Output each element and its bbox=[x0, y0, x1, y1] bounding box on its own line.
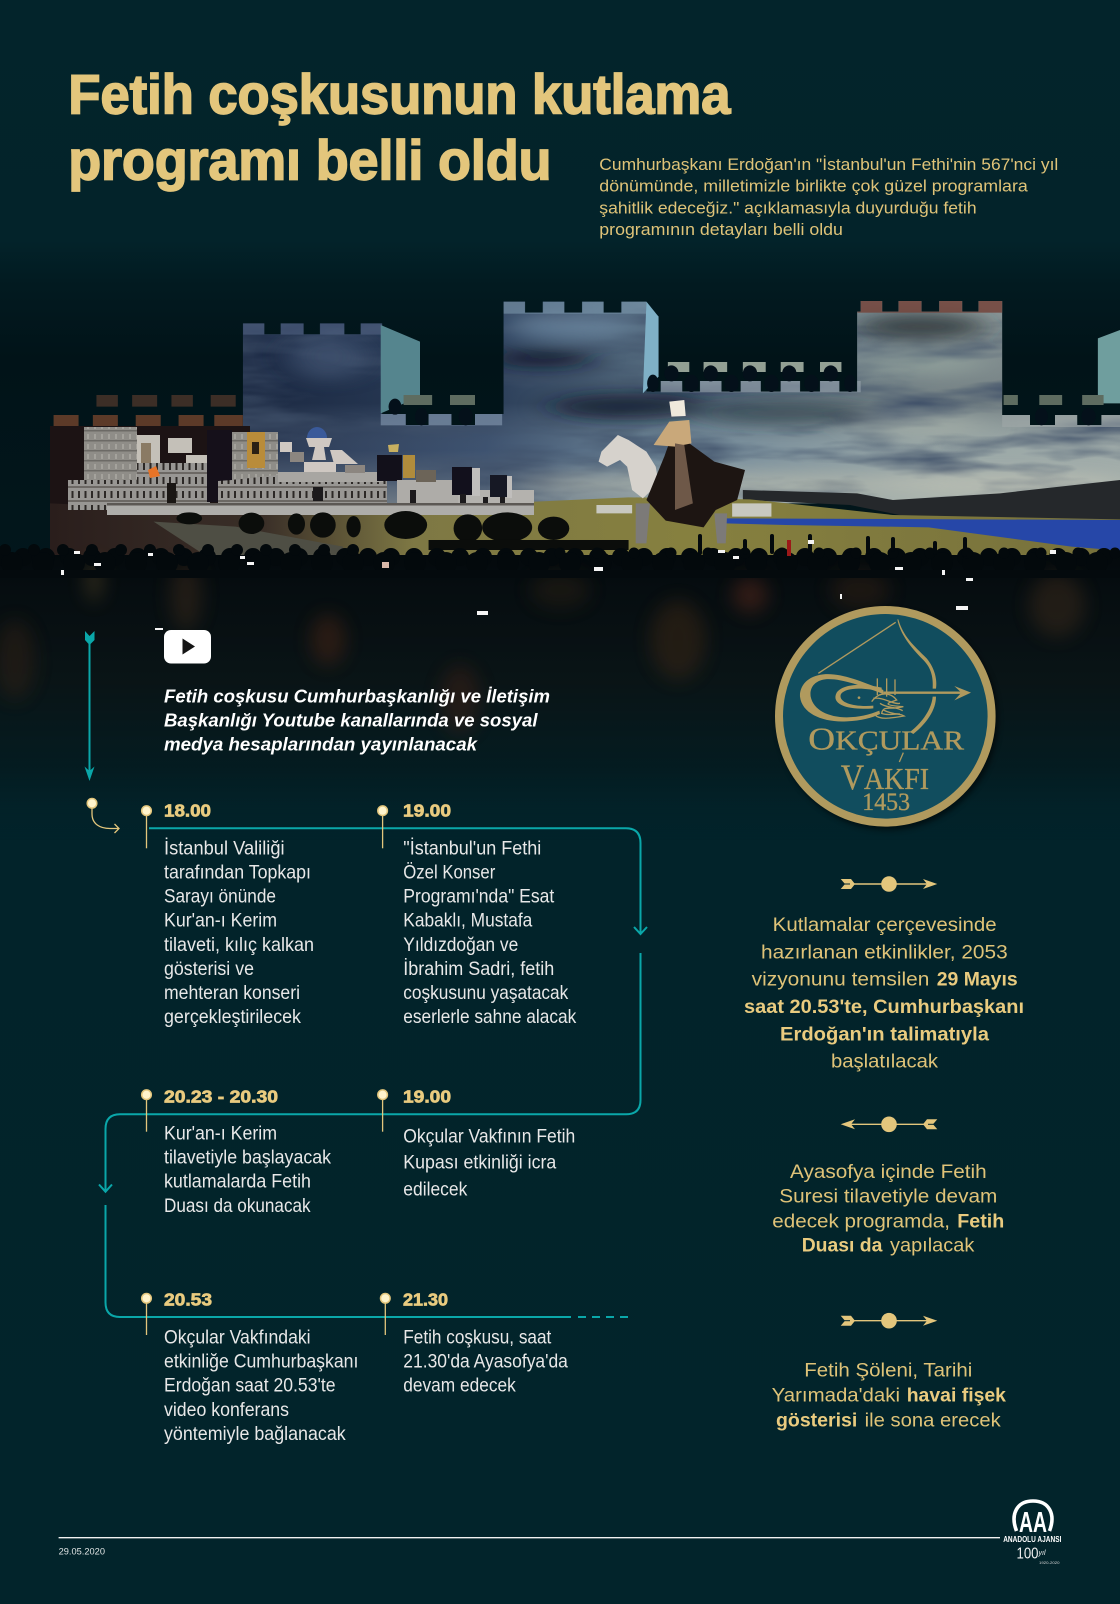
event 18.00: gösterisi ve bbox=[164, 958, 254, 980]
event 19.00 concert: Kabaklı, Mustafa bbox=[403, 910, 532, 932]
youtube broadcast note: Başkanlığı Youtube kanallarında ve sosyal bbox=[164, 710, 538, 731]
footer rule and date: 29.05.2020 bbox=[59, 1546, 105, 1557]
event 21.30 bbox=[380, 1290, 568, 1397]
event 18.00: Sarayı önünde bbox=[164, 886, 276, 908]
text: Hagia Sophia programme: Fetih bbox=[957, 1210, 1004, 1232]
event 20.23 - 20.30: 20.23 - 20.30 bbox=[164, 1086, 278, 1106]
youtube broadcast note bbox=[164, 686, 550, 755]
icon: youtube play button bbox=[164, 630, 211, 664]
text: fireworks show: Fetih Şöleni, Tarihi bbox=[804, 1360, 972, 1382]
brown lit shoulders in the crowd bbox=[0, 558, 1085, 735]
event 19.00 concert: Özel Konser bbox=[403, 861, 496, 883]
event 19.00 cup: Kupası etkinliği icra bbox=[403, 1152, 556, 1174]
intro text block: programının detayları belli oldu bbox=[599, 221, 843, 239]
event 18.00: mehteran konseri bbox=[164, 982, 300, 1004]
event 18.00: gerçekleştirilecek bbox=[164, 1006, 301, 1028]
mountains bbox=[743, 480, 1120, 519]
arrow: teal vertical arrow bbox=[84, 631, 94, 781]
logo: Anadolu Ajansı bbox=[1003, 1501, 1061, 1565]
event 18.00 bbox=[142, 801, 314, 1028]
event 21.30: devam edecek bbox=[403, 1375, 516, 1397]
text: celebrations start: saat 20.53'te, Cumhurbaşkanı bbox=[744, 996, 1024, 1018]
text: fireworks show: Yarımada'daki bbox=[772, 1385, 900, 1407]
intro text block bbox=[599, 155, 1058, 239]
photo: castle walls projection show with crowd bbox=[0, 297, 1120, 840]
event 20.23 - 20.30: Duası da okunacak bbox=[164, 1195, 311, 1217]
event 18.00: İstanbul Valiliği bbox=[164, 836, 285, 859]
dim crowd below the projection bbox=[0, 555, 1120, 840]
text: Hagia Sophia programme: Suresi tilavetiyle devam bbox=[779, 1186, 997, 1208]
event 18.00: 18.00 bbox=[164, 801, 211, 821]
event 19.00 concert: İbrahim Sadri, fetih bbox=[403, 957, 554, 980]
icon: bow and arrow with tughra bbox=[800, 619, 971, 762]
text: Hagia Sophia programme: edecek programda, bbox=[772, 1210, 950, 1232]
event 20.53: yöntemiyle bağlanacak bbox=[164, 1423, 346, 1445]
event 19.00 cup: Okçular Vakfının Fetih bbox=[403, 1125, 575, 1147]
arrow: teal timeline path bbox=[99, 828, 647, 1317]
intro text block: şahitlik edeceğiz." açıklamasıyla duyurduğu fetih bbox=[599, 199, 977, 217]
event 19.00 concert: Programı'nda" Esat bbox=[403, 886, 555, 908]
intro text block: dönümünde, milletimizle birlikte çok güzel programlara bbox=[599, 178, 1029, 196]
logo: Anadolu Ajansı: yıl bbox=[1038, 1550, 1046, 1557]
youtube broadcast note: medya hesaplarından yayınlanacak bbox=[164, 734, 479, 755]
event 20.23 - 20.30 bbox=[142, 1086, 331, 1217]
title bbox=[68, 62, 731, 191]
logo: Anadolu Ajansı: ANADOLU AJANSI bbox=[1003, 1534, 1061, 1544]
text: fireworks show: gösterisi bbox=[776, 1410, 857, 1432]
event 19.00 concert: Yıldızdoğan ve bbox=[403, 934, 518, 956]
text: celebrations start: 29 Mayıs bbox=[937, 969, 1018, 991]
text: Hagia Sophia programme: Ayasofya içinde Fetih bbox=[790, 1161, 987, 1183]
logo: Okçular Vakfı badge: OKÇULAR bbox=[808, 720, 964, 756]
event 20.53: Okçular Vakfındaki bbox=[164, 1326, 311, 1348]
logo: Anadolu Ajansı: 1920-2020 bbox=[1039, 1561, 1060, 1565]
river bbox=[725, 518, 1120, 551]
event 19.00 cup: 19.00 bbox=[403, 1086, 451, 1106]
event 20.53: etkinliğe Cumhurbaşkanı bbox=[164, 1351, 358, 1373]
arrow: gold start curve bbox=[87, 798, 119, 833]
event 19.00 concert: eserlerle sahne alacak bbox=[403, 1006, 577, 1028]
field bbox=[50, 497, 1120, 557]
text: celebrations start: hazırlanan etkinlikler, 2053 bbox=[761, 941, 1008, 963]
event 18.00: Kur'an-ı Kerim bbox=[164, 910, 277, 932]
event 20.53 bbox=[142, 1290, 358, 1445]
intro text block: Cumhurbaşkanı Erdoğan'ın "İstanbul'un Fethi'nin 567'nci yıl bbox=[599, 155, 1058, 174]
logo: Anadolu Ajansı: AA bbox=[1019, 1507, 1047, 1539]
event 21.30: 21.30 bbox=[403, 1290, 448, 1310]
icon: arrow divider 3 bbox=[841, 1313, 937, 1328]
text: fireworks show: ile sona erecek bbox=[865, 1410, 1001, 1432]
event 21.30: Fetih coşkusu, saat bbox=[403, 1326, 552, 1348]
text: Hagia Sophia programme: yapılacak bbox=[890, 1235, 975, 1257]
event 20.23 - 20.30: kutlamalarda Fetih bbox=[164, 1171, 311, 1193]
text: Hagia Sophia programme: Duası da bbox=[802, 1235, 883, 1257]
event 20.53: video konferans bbox=[164, 1399, 289, 1421]
icon: arrow divider 2 bbox=[841, 1116, 937, 1132]
text: celebrations start: vizyonunu temsilen bbox=[752, 969, 929, 991]
event 20.53: Erdoğan saat 20.53'te bbox=[164, 1375, 336, 1397]
event 18.00: tilaveti, kılıç kalkan bbox=[164, 934, 314, 956]
text: Hagia Sophia programme bbox=[772, 1161, 1004, 1257]
dark figures between battlements bbox=[389, 365, 1096, 425]
event 18.00: tarafından Topkapı bbox=[164, 861, 311, 883]
youtube broadcast note: Fetih coşkusu Cumhurbaşkanlığı ve İletişim bbox=[164, 686, 550, 707]
event 20.23 - 20.30: Kur'an-ı Kerim bbox=[164, 1122, 277, 1144]
text: celebrations start: Erdoğan'ın talimatıyla bbox=[780, 1023, 989, 1045]
event 21.30: 21.30'da Ayasofya'da bbox=[403, 1351, 568, 1373]
logo: Okçular Vakfı badge: VAKFI bbox=[841, 757, 929, 797]
castle projection bbox=[50, 297, 1120, 557]
event 20.53: 20.53 bbox=[164, 1290, 212, 1310]
event 19.00 concert bbox=[378, 801, 577, 1028]
city on the wall: Topkapı and Istanbul skyline bbox=[68, 427, 534, 515]
event 19.00 concert: coşkusunu yaşatacak bbox=[403, 982, 569, 1004]
phone screens in the crowd bbox=[61, 540, 1056, 630]
text: celebrations start: başlatılacak bbox=[831, 1051, 938, 1073]
text: fireworks show bbox=[772, 1360, 1006, 1432]
title: programı belli oldu bbox=[68, 128, 551, 191]
text: celebrations start: Kutlamalar çerçevesinde bbox=[773, 914, 997, 936]
title: Fetih coşkusunun kutlama bbox=[68, 62, 731, 125]
logo: Okçular Vakfı badge: 1453 bbox=[862, 789, 910, 816]
event 19.00 cup bbox=[378, 1086, 575, 1200]
text: celebrations start bbox=[744, 914, 1024, 1073]
trees, villages, horse and rider bbox=[176, 400, 771, 550]
crowd silhouettes bbox=[0, 536, 1120, 574]
event 20.23 - 20.30: tilavetiyle başlayacak bbox=[164, 1147, 331, 1169]
logo: Anadolu Ajansı: 100 bbox=[1016, 1546, 1039, 1562]
event 19.00 concert: "İstanbul'un Fethi bbox=[403, 836, 541, 859]
event 19.00 concert: 19.00 bbox=[403, 801, 451, 821]
icon: arrow divider 1 bbox=[841, 876, 937, 892]
logo: Okçular Vakfı badge bbox=[778, 610, 998, 830]
event 19.00 cup: edilecek bbox=[403, 1178, 468, 1200]
text: fireworks show: havai fişek bbox=[907, 1385, 1006, 1407]
